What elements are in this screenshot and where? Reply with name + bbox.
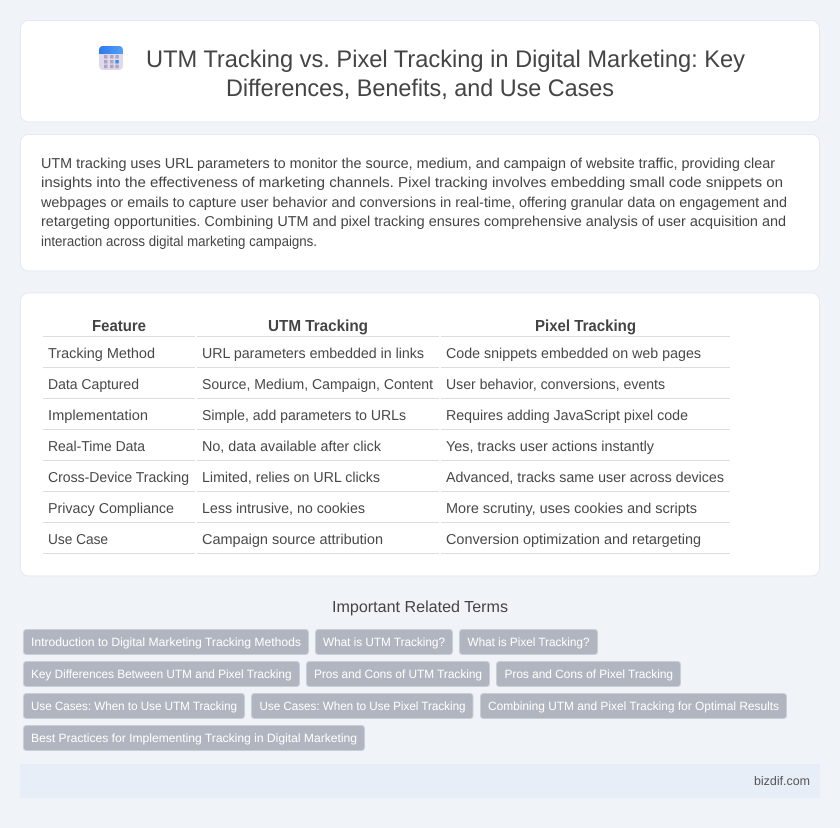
chip <box>24 630 308 654</box>
table header row: Feature <box>92 318 146 335</box>
table row: real-time data: No, data available after click <box>202 439 382 455</box>
table row: privacy compliance: Less intrusive, no cookies <box>202 501 365 517</box>
table row: data captured: Source, Medium, Campaign, Content <box>202 377 433 393</box>
table row: use case: Conversion optimization and retargeting <box>446 532 701 548</box>
table row: implementation: Implementation <box>48 408 148 424</box>
chip: What is Pixel Tracking? <box>468 635 590 649</box>
table row: privacy compliance <box>43 501 730 523</box>
table row: use case: Campaign source attribution <box>202 532 383 548</box>
chip <box>460 630 598 654</box>
table row: implementation <box>43 408 730 430</box>
chip <box>316 630 452 654</box>
chip: Combining UTM and Pixel Tracking for Optimal Results <box>488 699 779 713</box>
panel: comparison table <box>20 293 820 576</box>
text block: summary: interaction across digital marketing campaigns. <box>41 234 317 250</box>
text block: summary: UTM tracking uses URL parameters to monitor the source, medium, and campaign of website traffic, providing clear <box>41 156 775 172</box>
table row: implementation: Simple, add parameters to URLs <box>202 408 406 424</box>
chip: Introduction to Digital Marketing Tracking Methods <box>31 635 301 649</box>
table header row: UTM Tracking <box>268 318 368 335</box>
table row: tracking method <box>43 346 730 368</box>
table row: cross-device tracking <box>43 470 730 492</box>
chip: Pros and Cons of UTM Tracking <box>314 667 482 681</box>
chip: Use Cases: When to Use UTM Tracking <box>31 699 237 713</box>
table row: tracking method: Code snippets embedded on web pages <box>446 346 701 362</box>
table header row: Pixel Tracking <box>535 318 636 335</box>
table row: real-time data: Real-Time Data <box>48 439 145 455</box>
chip: Best Practices for Implementing Tracking in Digital Marketing <box>31 731 357 745</box>
table row: data captured <box>43 377 730 399</box>
panel: related term chips <box>24 630 786 750</box>
table row: cross-device tracking: Advanced, tracks same user across devices <box>446 470 724 486</box>
title: UTM Tracking vs. Pixel Tracking in Digital Marketing: Key <box>146 46 745 73</box>
heading: important related terms: Important Related Terms <box>332 599 508 616</box>
table row: real-time data <box>43 439 730 461</box>
table row: use case: Use Case <box>48 532 108 548</box>
title <box>146 46 745 102</box>
chip <box>252 694 473 718</box>
table row: tracking method: Tracking Method <box>48 346 155 362</box>
chip: Pros and Cons of Pixel Tracking <box>504 667 673 681</box>
table row: privacy compliance: Privacy Compliance <box>48 501 174 517</box>
chip <box>24 694 244 718</box>
table row: tracking method: URL parameters embedded in links <box>202 346 424 362</box>
table header row <box>43 318 730 337</box>
text block: summary: retargeting opportunities. Combining UTM and pixel tracking ensures comprehensive analysis of user acquisition and <box>41 214 786 230</box>
footer band <box>20 764 820 798</box>
panel: header <box>20 20 820 122</box>
footer credit: bizdif.com <box>754 774 810 788</box>
table row: use case <box>43 532 730 554</box>
table row: cross-device tracking: Limited, relies on URL clicks <box>202 470 380 486</box>
table row: data captured: User behavior, conversions, events <box>446 377 665 393</box>
chip <box>24 726 364 750</box>
panel: summary paragraph <box>20 134 820 271</box>
table row: implementation: Requires adding JavaScript pixel code <box>446 408 688 424</box>
table row: real-time data: Yes, tracks user actions instantly <box>446 439 655 455</box>
chip: Key Differences Between UTM and Pixel Tracking <box>31 667 292 681</box>
chip <box>24 662 300 686</box>
table row: cross-device tracking: Cross-Device Tracking <box>48 470 189 486</box>
chip: What is UTM Tracking? <box>323 635 445 649</box>
table row: privacy compliance: More scrutiny, uses cookies and scripts <box>446 501 697 517</box>
text block: summary <box>40 156 787 250</box>
chip <box>496 662 680 686</box>
table row: data captured: Data Captured <box>48 377 139 393</box>
chip: Use Cases: When to Use Pixel Tracking <box>260 699 466 713</box>
chip <box>306 662 490 686</box>
title: Differences, Benefits, and Use Cases <box>226 75 614 102</box>
icon: calendar <box>99 46 123 70</box>
chip <box>480 694 786 718</box>
text block: summary: insights into the effectiveness of marketing channels. Pixel tracking involves embedding small code snippets on <box>41 175 783 191</box>
text block: summary: webpages or emails to capture user behavior and conversions in real-time, offering granular data on engagement and <box>40 195 787 211</box>
